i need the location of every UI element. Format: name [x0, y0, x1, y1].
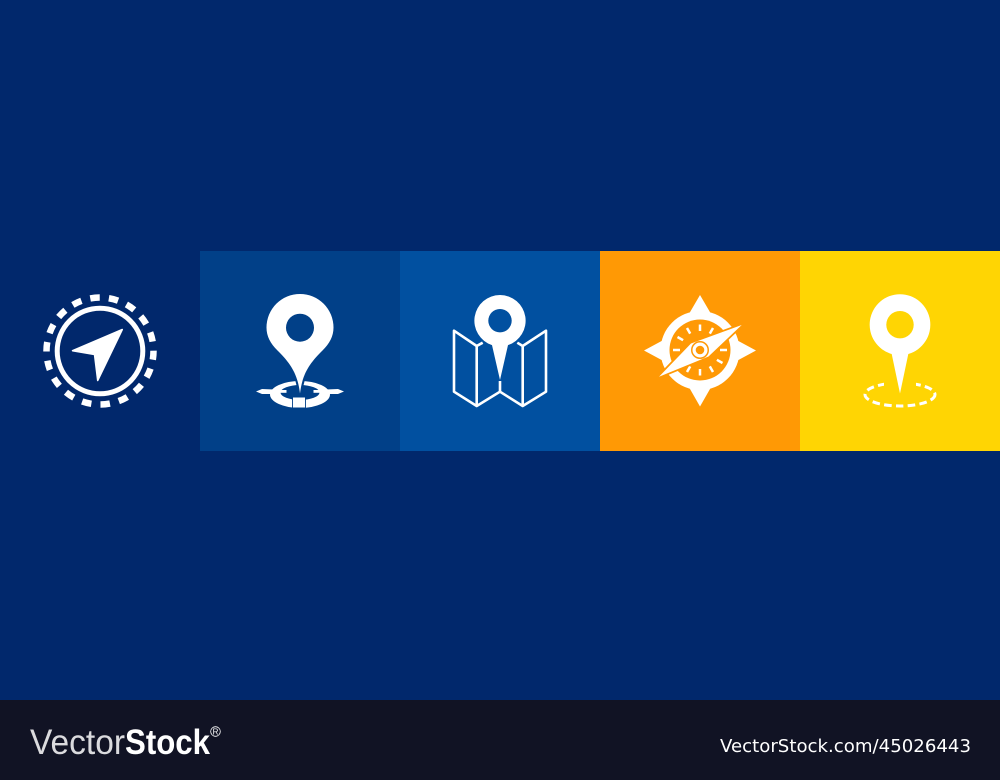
icon: map pin on target ring	[256, 294, 344, 408]
brand logo: Stock	[125, 723, 210, 762]
brand logo	[30, 723, 220, 762]
panel: orange square	[600, 251, 800, 451]
panel: medium blue square	[400, 251, 600, 451]
icon: map pin over dashed ellipse	[865, 294, 935, 406]
brand logo: R	[213, 728, 219, 736]
icon: compass rose	[644, 295, 756, 406]
icon: navigation arrow in dashed circle	[46, 298, 154, 404]
icon: map pin on folded map	[454, 295, 546, 406]
panel: blue square	[200, 251, 400, 451]
brand logo: Vector	[30, 723, 125, 762]
footer bar	[0, 700, 1000, 780]
panel: yellow square	[800, 251, 1000, 451]
image reference: VectorStock.com/45026443	[720, 737, 971, 757]
